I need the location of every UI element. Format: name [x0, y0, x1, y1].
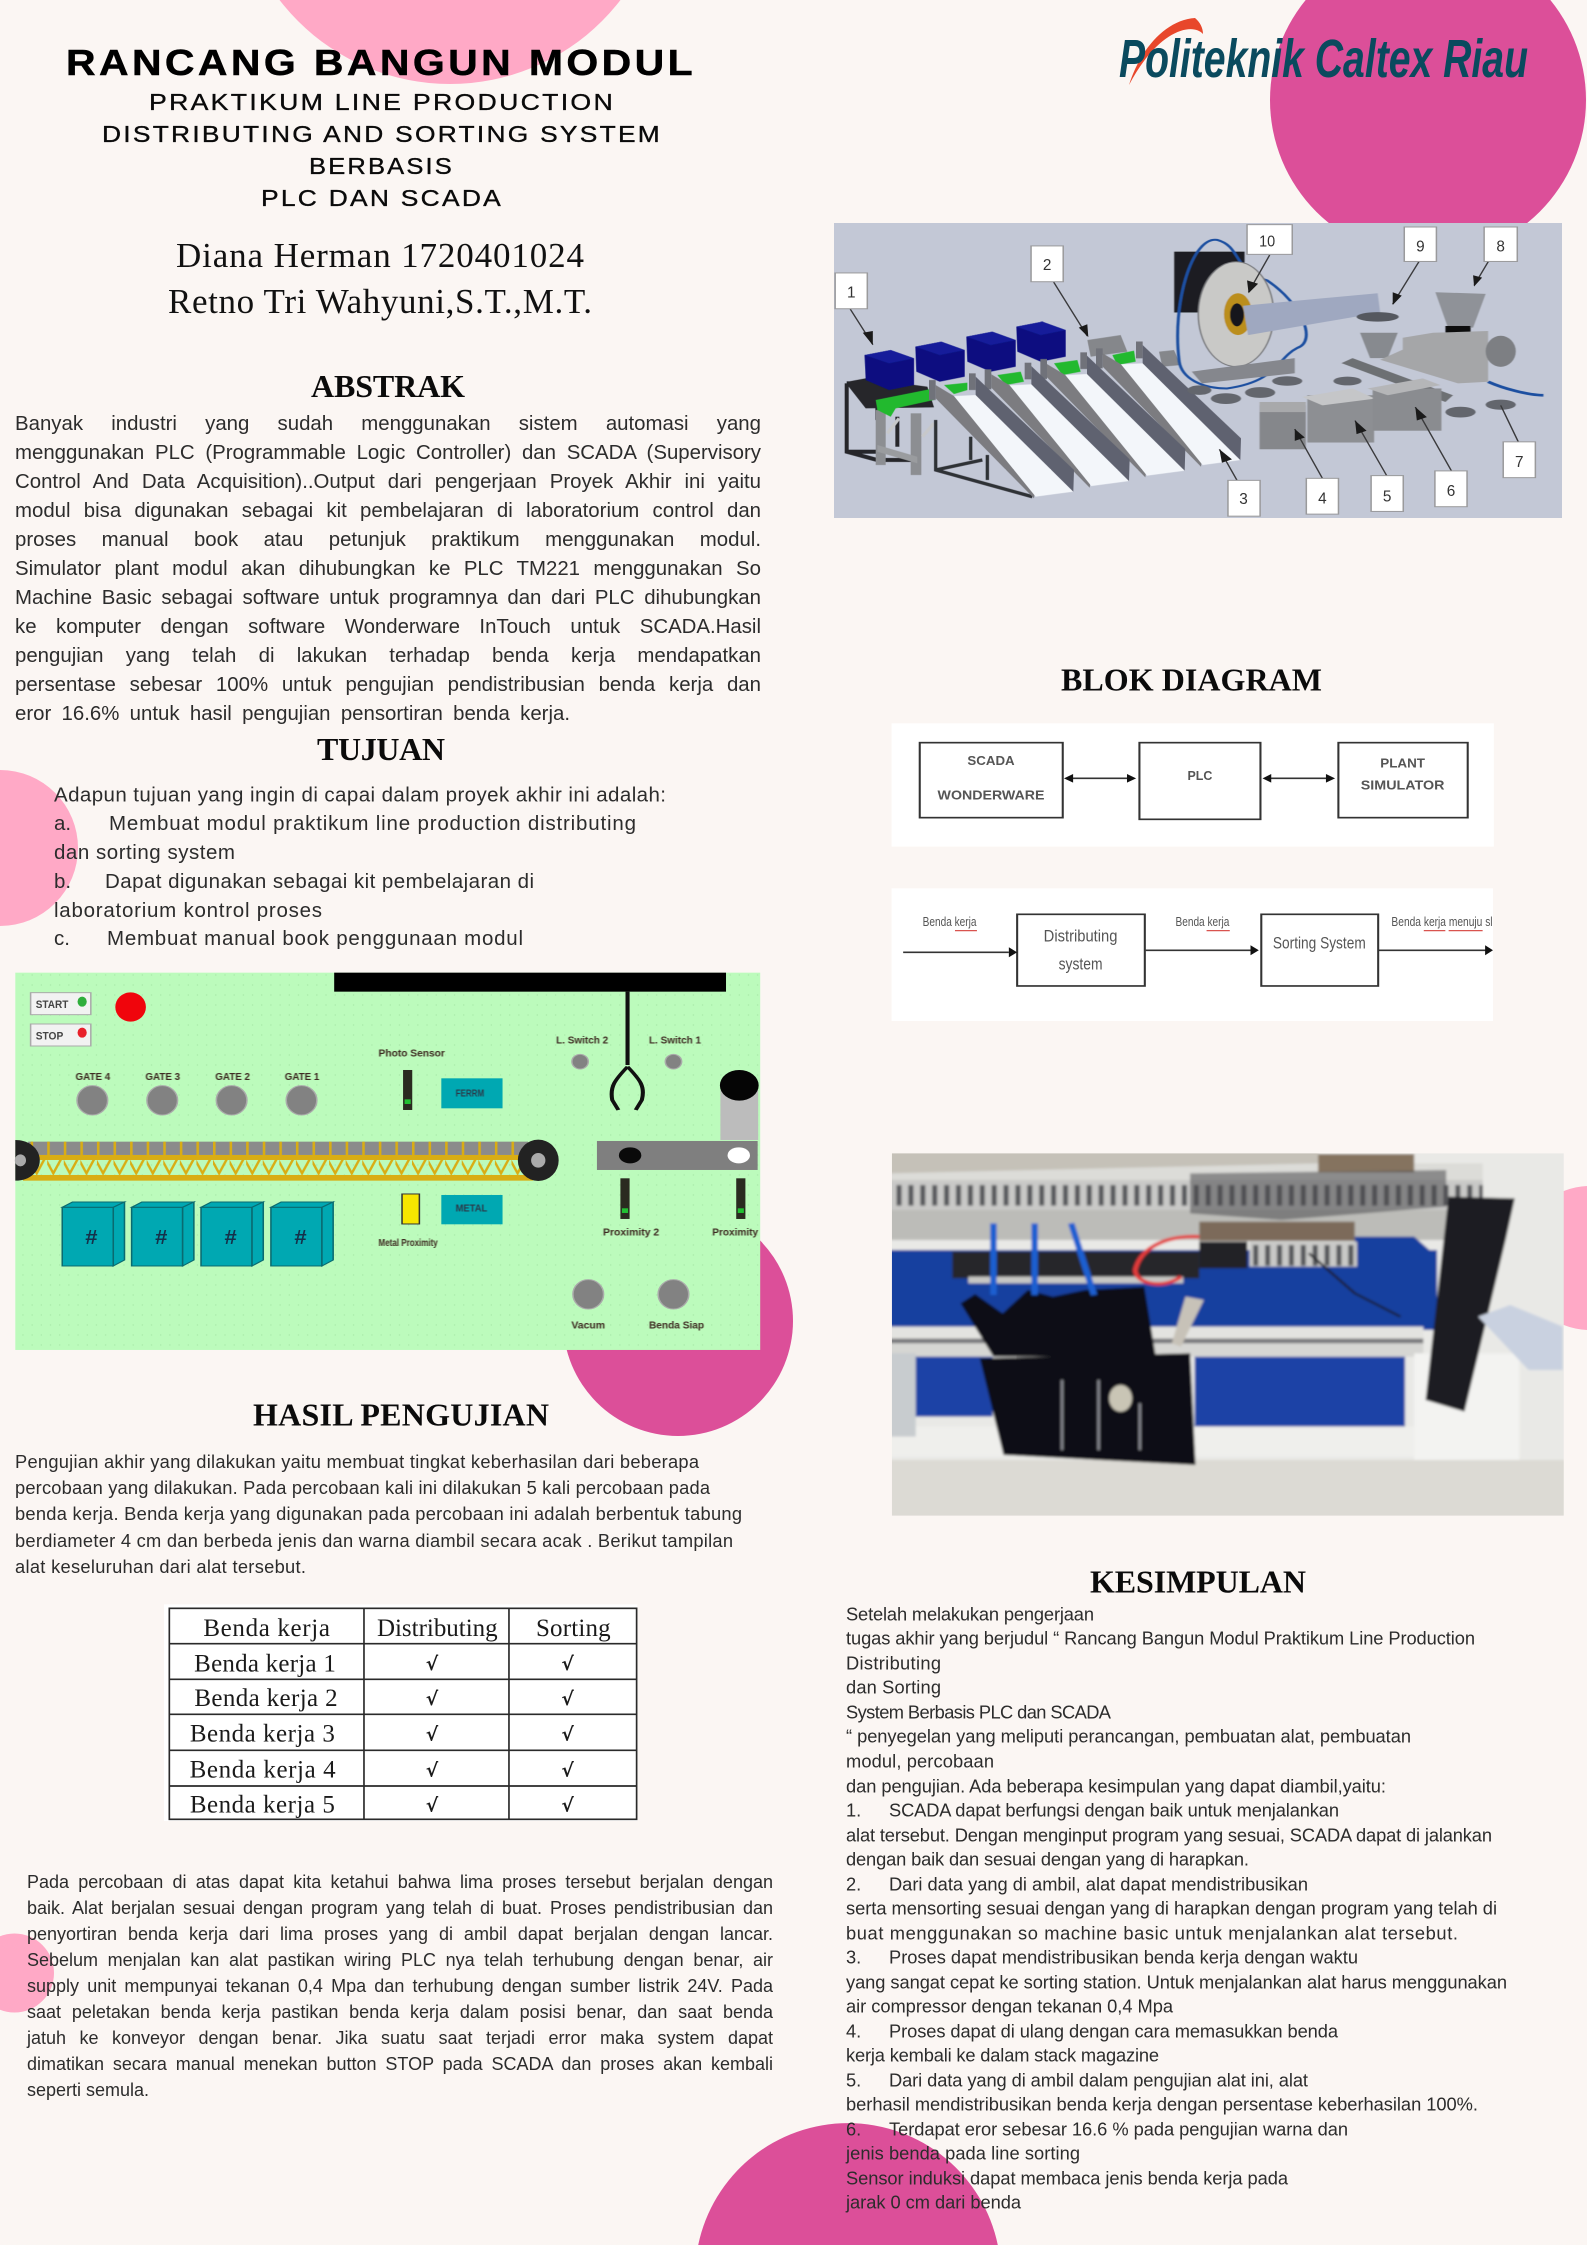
- figure: SCADA HMI screen: #: [224, 1227, 237, 1249]
- callout labels: 2: [1043, 257, 1051, 274]
- figure: block diagram SCADA PLC plant: PLANT: [1380, 756, 1426, 771]
- text block: kesimpulan: “ penyegelan yang meliputi perancangan, pembuatan alat, pembuatan: [846, 1726, 1411, 1746]
- text block: abstrak: pengujian yang telah di lakukan terhadap benda kerja mendapatkan: [15, 644, 761, 666]
- results table: √: [426, 1725, 439, 1746]
- text block: abstrak: Simulator plant modul akan dihubungkan ke PLC TM221 menggunakan So: [15, 558, 761, 580]
- text block: kesimpulan: berhasil mendistribusikan benda kerja dengan persentase keberhasilan 100%.: [846, 2094, 1478, 2114]
- text block: hasil pengujian discussion: [26, 1872, 773, 2100]
- text block: hasil pengujian discussion: dimatikan secara manual menekan button STOP pada SCADA dan proses akan kembali: [27, 2054, 773, 2074]
- text block: hasil pengujian discussion: Pada percobaan di atas dapat kita ketahui bahwa lima proses tersebut berjalan dengan: [27, 1872, 773, 1892]
- text block: tujuan: laboratorium kontrol proses: [54, 899, 322, 922]
- figure: block diagram distributing and sorting: Sorting System: [1273, 933, 1366, 952]
- text block: kesimpulan: dengan baik dan sesuai dengan yang di harapkan.: [846, 1848, 1249, 1870]
- subtitle: DISTRIBUTING AND SORTING SYSTEM: [102, 121, 662, 147]
- text block: tujuan: c.: [54, 927, 70, 950]
- text block: hasil pengujian intro: benda kerja. Benda kerja yang digunakan pada percobaan ini adalah berbentuk tabung: [15, 1503, 742, 1524]
- text block: kesimpulan: air compressor dengan tekanan 0,4 Mpa: [846, 1996, 1174, 2016]
- results table: Benda kerja 5: [190, 1792, 335, 1819]
- conveyor and sorting chutes: [847, 322, 1241, 498]
- text block: abstrak: Machine Basic sebagai software untuk programnya dan dari PLC dihubungkan: [15, 586, 761, 608]
- text block: kesimpulan: kerja kembali ke dalam stack magazine: [846, 2044, 1159, 2066]
- circle: small left pink: [0, 1934, 54, 2012]
- text block: kesimpulan: Dari data yang di ambil dalam pengujian alat ini, alat: [889, 2070, 1308, 2090]
- start and stop buttons: STOP: [36, 1030, 63, 1042]
- circle: left pink: [0, 770, 78, 926]
- figure: SCADA HMI screen: #: [294, 1227, 307, 1249]
- figure: SCADA HMI screen: GATE 1: [285, 1071, 319, 1082]
- start and stop buttons: [31, 993, 91, 1046]
- sensors and readouts: [402, 1070, 745, 1224]
- figure: block diagram distributing and sorting: Benda kerja menuju sl: [1391, 915, 1493, 930]
- text block: kesimpulan: 4.: [846, 2020, 861, 2042]
- results table: Benda kerja: [203, 1615, 330, 1642]
- text block: kesimpulan: buat menggunakan so machine basic untuk menjalankan alat tersebut.: [846, 1922, 1458, 1944]
- text block: kesimpulan: Distributing: [846, 1652, 941, 1674]
- text block: kesimpulan: yang sangat cepat ke sorting station. Untuk menjalankan alat harus menggunakan: [846, 1972, 1507, 1992]
- figure: SCADA HMI screen: L. Switch 2: [556, 1034, 608, 1046]
- text block: abstrak: eror 16.6% untuk hasil pengujian pensortiran benda kerja.: [15, 702, 570, 724]
- text block: hasil pengujian discussion: supply unit mempunyai tekanan 0,4 Mpa dan terhubung dengan sumber listrik 24V. Pada: [27, 1976, 773, 1996]
- results table: √: [561, 1761, 574, 1782]
- text block: hasil pengujian discussion: baik. Alat berjalan sesuai dengan program yang telah di buat. Proses pendistribusian dan: [27, 1898, 773, 1918]
- figure: SCADA HMI screen: Vacum: [571, 1319, 605, 1331]
- results table: [164, 1604, 637, 1821]
- results table: √: [561, 1725, 574, 1746]
- text block: kesimpulan: jenis benda pada line sorting: [845, 2142, 1080, 2164]
- figure: SCADA HMI screen: #: [85, 1227, 97, 1249]
- figure: block diagram SCADA PLC plant: SCADA: [967, 753, 1015, 769]
- results table: Distributing: [377, 1615, 498, 1642]
- callout labels: [835, 225, 1535, 516]
- results table: Benda kerja 1: [194, 1651, 336, 1678]
- results table: √: [561, 1689, 574, 1710]
- figure: SCADA HMI screen: GATE 3: [145, 1071, 180, 1082]
- callout labels: 3: [1239, 491, 1248, 508]
- callout labels: 8: [1496, 238, 1505, 256]
- gates and lamps: [77, 1054, 689, 1309]
- figure: plant 3D model with numbered callouts: [834, 223, 1562, 518]
- text block: hasil pengujian discussion: penyortiran benda kerja dari lima proses yang di ambil dapat berjalan dengan lancar.: [27, 1924, 773, 1944]
- text block: tujuan: a.: [54, 812, 71, 835]
- text block: abstrak: Banyak industri yang sudah menggunakan sistem automasi yang: [15, 412, 761, 434]
- figure: SCADA HMI screen: Benda Siap: [649, 1319, 704, 1331]
- text block: kesimpulan: serta mensorting sesuai dengan yang di harapkan dengan program yang telah di: [846, 1898, 1497, 1918]
- figure: block diagram distributing and sorting: Benda kerja: [1175, 915, 1229, 930]
- figure: SCADA HMI screen: Metal Proximity: [379, 1237, 438, 1248]
- figure: block diagram distributing and sorting: Distributing: [1044, 927, 1117, 945]
- heading: blok diagram: BLOK DIAGRAM: [1061, 662, 1322, 698]
- text block: abstrak: menggunakan PLC (Programmable Logic Controller) dan SCADA (Supervisory: [15, 442, 761, 464]
- text block: tujuan: Membuat modul praktikum line production distributing: [109, 812, 636, 835]
- authors: Retno Tri Wahyuni,S.T.,M.T.: [168, 282, 592, 321]
- results table: √: [426, 1689, 439, 1710]
- subtitle: PRAKTIKUM LINE PRODUCTION: [149, 89, 615, 115]
- text block: hasil pengujian intro: percobaan yang dilakukan. Pada percobaan kali ini dilakukan 5 kali percobaan pada: [15, 1477, 711, 1498]
- authors: Diana Herman 1720401024: [176, 236, 584, 275]
- heading: abstrak: ABSTRAK: [311, 368, 465, 404]
- subtitle: BERBASIS: [309, 153, 454, 179]
- conveyor: [15, 1140, 559, 1181]
- results table: √: [426, 1796, 439, 1817]
- text block: kesimpulan: Proses dapat di ulang dengan cara memasukkan benda: [889, 2020, 1339, 2042]
- callout labels: 1: [847, 284, 856, 301]
- figure: SCADA HMI screen: [15, 973, 760, 1350]
- text block: kesimpulan: 6.: [846, 2118, 861, 2140]
- figure: block diagram SCADA PLC plant: PLC: [1188, 768, 1212, 784]
- text block: kesimpulan: jarak 0 cm dari benda: [845, 2192, 1022, 2212]
- text block: kesimpulan: modul, percobaan: [846, 1750, 994, 1772]
- text block: hasil pengujian discussion: seperti semula.: [27, 2080, 149, 2100]
- callout labels: 5: [1383, 488, 1391, 505]
- figure: SCADA HMI screen: L. Switch 1: [649, 1034, 701, 1046]
- text block: kesimpulan: Terdapat eror sebesar 16.6 % pada pengujian warna dan: [889, 2118, 1348, 2140]
- text block: kesimpulan: 1.: [846, 1800, 861, 1820]
- figure: block diagram distributing and sorting: Benda kerja: [923, 915, 977, 930]
- text block: abstrak: [15, 412, 761, 724]
- figure: SCADA HMI screen: #: [155, 1227, 167, 1249]
- circle: middle magenta: [563, 1206, 793, 1436]
- callout labels: 7: [1515, 453, 1524, 471]
- figure: photo of the built module: [888, 1150, 1570, 1520]
- figure: block diagram SCADA PLC plant: SIMULATOR: [1361, 778, 1445, 793]
- heading: tujuan: TUJUAN: [317, 731, 445, 767]
- heading: kesimpulan: KESIMPULAN: [1090, 1564, 1306, 1600]
- subtitle: [102, 89, 662, 211]
- figure: block diagram distributing and sorting: system: [1059, 954, 1103, 973]
- bins: [62, 1202, 333, 1266]
- text block: kesimpulan: Dari data yang di ambil, alat dapat mendistribusikan: [889, 1874, 1308, 1894]
- text block: kesimpulan: 3.: [846, 1946, 861, 1968]
- text block: kesimpulan: dan pengujian. Ada beberapa kesimpulan yang dapat diambil,yaitu:: [846, 1776, 1386, 1796]
- callout labels: 9: [1416, 238, 1425, 256]
- text block: tujuan: dan sorting system: [54, 841, 235, 864]
- text block: hasil pengujian intro: [15, 1451, 742, 1577]
- sensors and readouts: FERRM: [456, 1087, 484, 1099]
- circle: right pink: [1518, 1186, 1587, 1330]
- results table: √: [426, 1654, 439, 1675]
- text block: abstrak: modul bisa digunakan sebagai kit pembelajaran di laboratorium control dan: [15, 500, 761, 522]
- figure: SCADA HMI screen: Proximity: [712, 1226, 759, 1238]
- gripper: [612, 992, 643, 1110]
- text block: abstrak: Control And Data Acquisition)..Output dari pengerjaan Proyek Akhir ini yaitu: [15, 470, 761, 492]
- text block: hasil pengujian discussion: Sebelum menjalan kan alat pastikan wiring PLC nya telah terhubung dengan benar, air: [27, 1950, 773, 1970]
- text block: kesimpulan: 5.: [846, 2070, 861, 2090]
- text block: hasil pengujian intro: alat keseluruhan dari alat tersebut.: [15, 1556, 306, 1577]
- start and stop buttons: START: [36, 999, 68, 1011]
- figure: block diagram SCADA PLC plant: WONDERWARE: [938, 788, 1045, 803]
- heading: hasil pengujian: HASIL PENGUJIAN: [253, 1396, 549, 1432]
- text block: kesimpulan: Setelah melakukan pengerjaan: [846, 1604, 1094, 1624]
- results table: Sorting: [536, 1615, 611, 1642]
- text block: kesimpulan: [845, 1604, 1507, 2212]
- title: RANCANG BANGUN MODUL: [66, 42, 696, 83]
- callout arrows: [850, 255, 1518, 480]
- text block: kesimpulan: tugas akhir yang berjudul “ Rancang Bangun Modul Praktikum Line Production: [846, 1628, 1475, 1648]
- figure: SCADA HMI screen: GATE 2: [215, 1071, 250, 1082]
- text block: tujuan: b.: [54, 870, 71, 893]
- figure: SCADA HMI screen: Proximity 2: [603, 1226, 659, 1238]
- circle: top pink: [235, 0, 665, 84]
- results table: Benda kerja 2: [194, 1685, 338, 1712]
- text block: tujuan: [54, 784, 666, 950]
- results table: √: [426, 1761, 439, 1782]
- text block: tujuan: Membuat manual book penggunaan modul: [107, 927, 523, 950]
- authors: [168, 236, 592, 321]
- results table: √: [561, 1796, 574, 1817]
- text block: abstrak: ke komputer dengan software Wonderware InTouch untuk SCADA.Hasil: [15, 616, 761, 638]
- results table: Benda kerja 3: [190, 1721, 335, 1748]
- figure: SCADA HMI screen: Photo Sensor: [379, 1047, 445, 1059]
- text block: hasil pengujian intro: Pengujian akhir yang dilakukan yaitu membuat tingkat keberhasilan dari beberapa: [15, 1451, 700, 1472]
- text block: hasil pengujian intro: berdiameter 4 cm dan berbeda jenis dan warna diambil secara acak . Berikut tampilan: [15, 1530, 733, 1551]
- background: [834, 223, 1562, 518]
- text block: kesimpulan: alat tersebut. Dengan menginput program yang sesuai, SCADA dapat di jalankan: [846, 1824, 1492, 1846]
- callout labels: 10: [1259, 233, 1275, 251]
- results table: Benda kerja 4: [190, 1756, 336, 1783]
- text block: tujuan: Adapun tujuan yang ingin di capai dalam proyek akhir ini adalah:: [54, 784, 666, 806]
- text block: kesimpulan: System Berbasis PLC dan SCADA: [846, 1702, 1112, 1722]
- slider: [597, 1070, 759, 1170]
- circle: top right magenta: [1270, 0, 1586, 258]
- text block: kesimpulan: SCADA dapat berfungsi dengan baik untuk menjalankan: [889, 1800, 1339, 1820]
- text block: kesimpulan: dan Sorting: [846, 1676, 941, 1698]
- wheel, arm, machine and control boxes: [1174, 240, 1543, 449]
- sensors and readouts: METAL: [456, 1202, 487, 1214]
- figure: SCADA HMI screen: GATE 4: [76, 1071, 111, 1082]
- results table: √: [561, 1654, 574, 1675]
- callout labels: 6: [1447, 482, 1455, 500]
- text block: kesimpulan: 2.: [846, 1874, 861, 1894]
- text block: tujuan: Dapat digunakan sebagai kit pembelajaran di: [105, 870, 534, 893]
- callout labels: 4: [1318, 490, 1327, 507]
- figure: block diagram distributing and sorting: [892, 888, 1493, 1021]
- subtitle: PLC DAN SCADA: [261, 185, 503, 211]
- text block: hasil pengujian discussion: jatuh ke konveyor dengan benar. Jika suatu saat terjadi error maka system dapat: [27, 2028, 773, 2048]
- text block: abstrak: proses manual book atau petunjuk praktikum menggunakan modul.: [15, 528, 761, 550]
- text block: kesimpulan: Sensor induksi dapat membaca jenis benda kerja pada: [846, 2168, 1289, 2188]
- figure: block diagram SCADA PLC plant: [892, 723, 1494, 847]
- text block: hasil pengujian discussion: saat peletakan benda kerja pastikan benda kerja dalam posisi benar, dan saat benda: [27, 2002, 773, 2022]
- circle: bottom magenta: [698, 2123, 998, 2245]
- text block: abstrak: persentase sebesar 100% untuk pengujian pendistribusian benda kerja dan: [15, 674, 761, 696]
- text block: kesimpulan: Proses dapat mendistribusikan benda kerja dengan waktu: [889, 1946, 1358, 1968]
